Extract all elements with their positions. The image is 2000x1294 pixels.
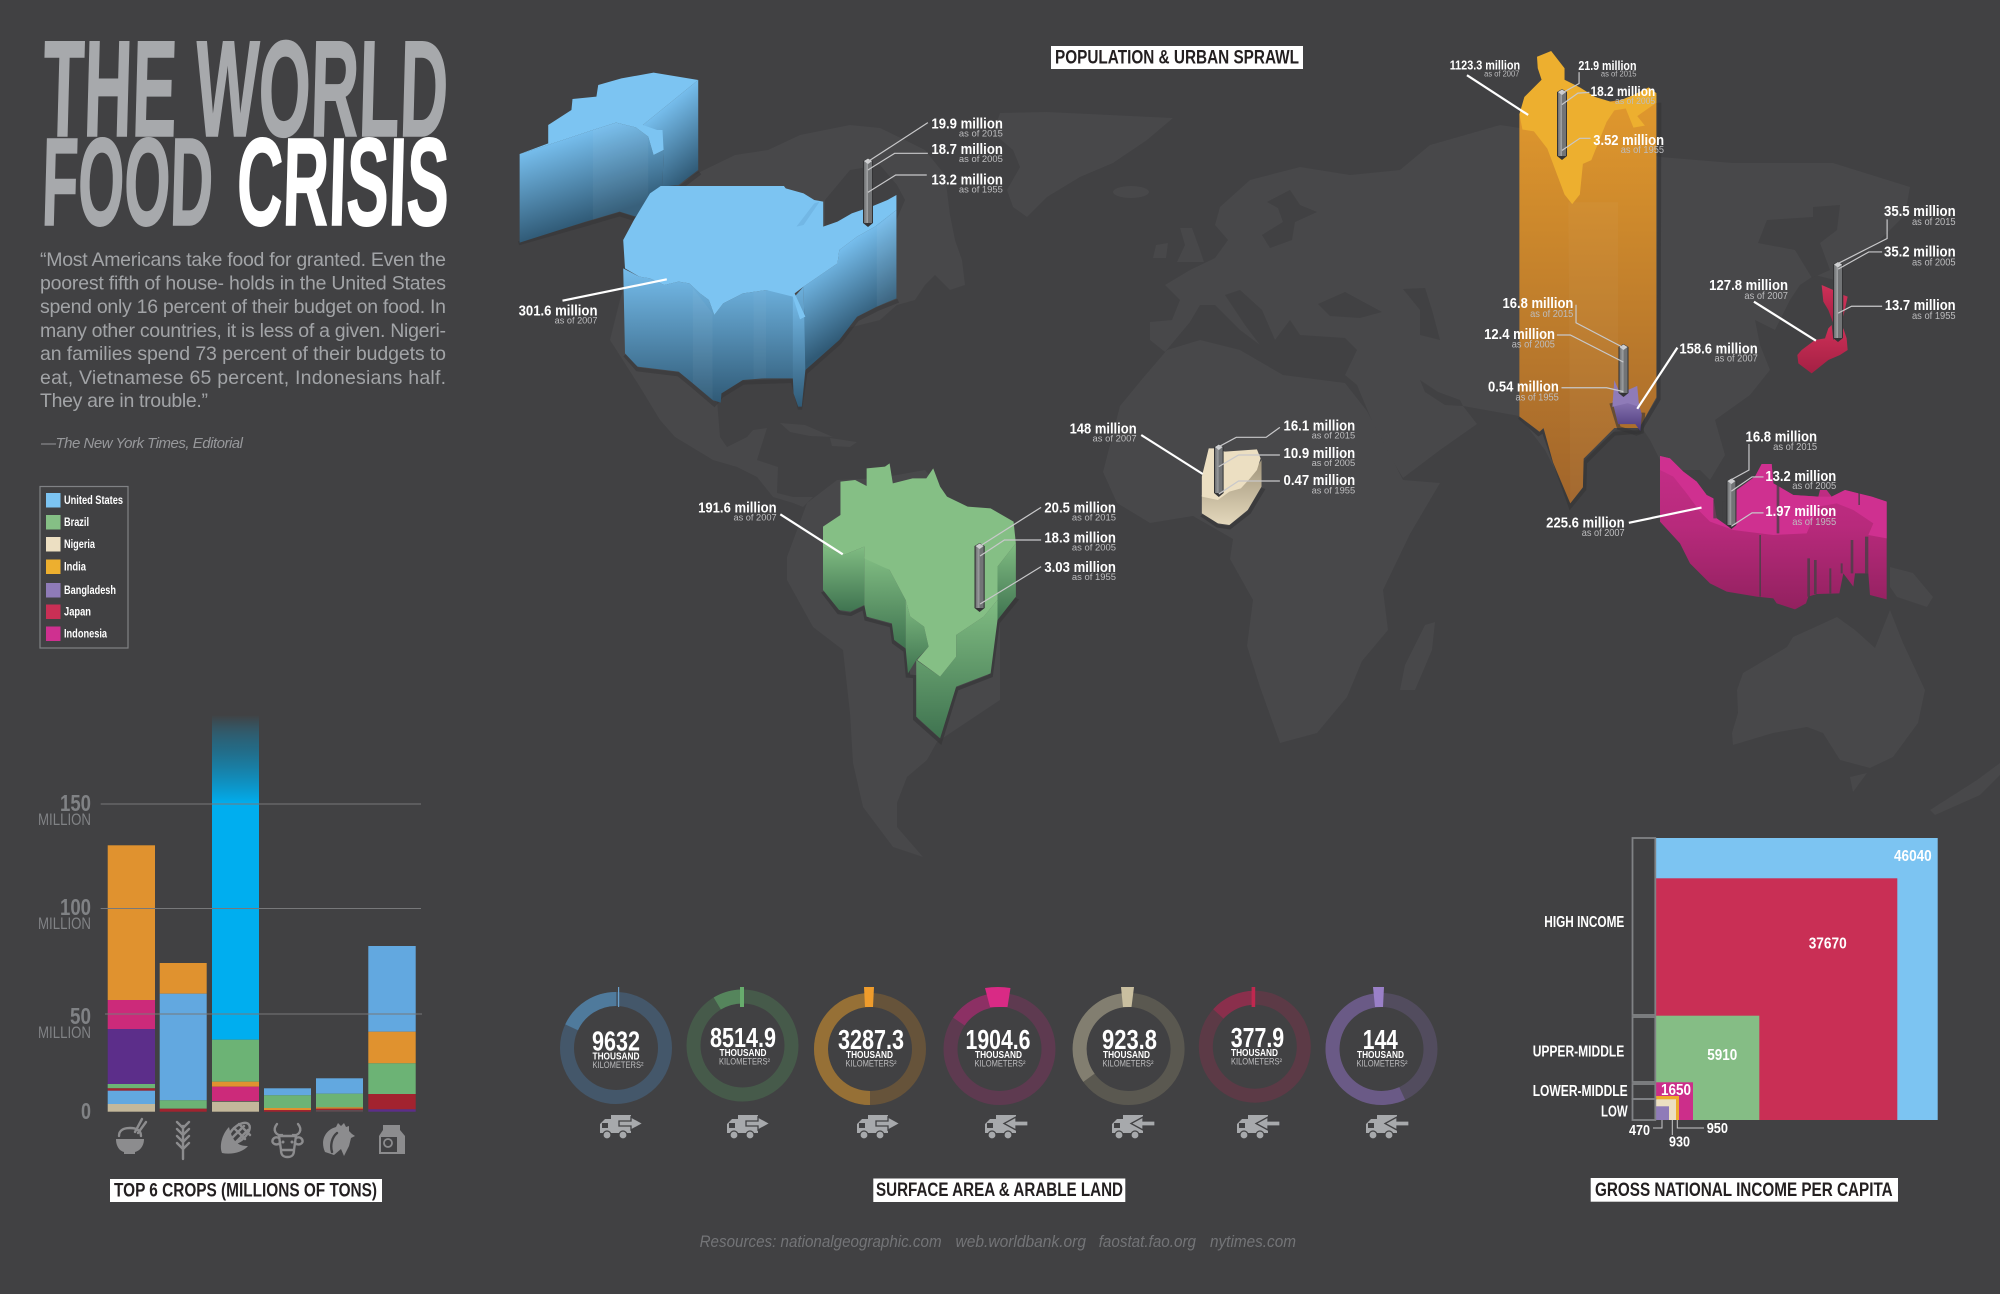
chart axis labels: MILLION [38, 1023, 91, 1042]
callouts: India: as of 2015 [1601, 70, 1637, 79]
callouts: Nigeria: 16.1 million [1284, 417, 1355, 434]
title [40, 13, 451, 252]
panel: Japan 3D map [1709, 203, 1956, 373]
nested area chart: gross national income per capita: UPPER-MIDDLE [1533, 1044, 1625, 1061]
donut: Brazil surface area [675, 978, 810, 1113]
callouts: Japan: 35.2 million [1884, 244, 1956, 261]
callouts: Japan: as of 1955 [1912, 311, 1956, 322]
icon: rooster [323, 1123, 355, 1156]
title: CRISIS [235, 113, 451, 252]
donut: Bangladesh surface area [1316, 984, 1447, 1114]
donut: India surface area [821, 987, 919, 1098]
callouts: Bangladesh: 16.8 million [1503, 295, 1573, 312]
callouts: Nigeria: 148 million [1070, 420, 1137, 437]
legend: Brazil [64, 515, 89, 529]
nested area chart: gross national income per capita [1533, 838, 1938, 1151]
callouts: US: as of 1955 [959, 185, 1003, 196]
nested area chart: gross national income per capita: HIGH INCOME [1544, 914, 1625, 931]
callouts: Bangladesh: as of 2005 [1512, 340, 1555, 351]
chart grid lines [101, 804, 422, 1014]
legend: Bangladesh [64, 583, 116, 597]
icon: cow head [272, 1124, 303, 1157]
callouts: India: 3.52 million [1593, 132, 1664, 149]
callouts: Brazil [698, 499, 1116, 604]
population pin: Indonesia [1726, 478, 1736, 529]
callouts: US: as of 2007 [555, 316, 597, 326]
callouts: Bangladesh: as of 2015 [1530, 309, 1574, 320]
callouts: Indonesia: 16.8 million [1746, 428, 1817, 445]
population pin: Japan [1833, 262, 1843, 342]
icon: milk carton [379, 1125, 405, 1154]
legend [40, 486, 128, 648]
quote text block: They are in trouble.” [40, 390, 208, 412]
donut: United States surface area [551, 983, 681, 1113]
resources footer: web.worldbank.org [956, 1233, 1087, 1251]
callouts: Indonesia: as of 1955 [1792, 517, 1837, 528]
heading: gross national income per capita: GROSS NATIONAL INCOME PER CAPITA [1595, 1180, 1893, 1201]
legend: United States [64, 493, 123, 507]
quote text block: an families spend 73 percent of their budgets to [40, 343, 446, 365]
callouts: Indonesia [1546, 428, 1837, 539]
callouts: Japan: as of 2015 [1912, 217, 1956, 228]
icons: export and import trucks [600, 1115, 1409, 1139]
callouts: Brazil: as of 2007 [733, 513, 777, 523]
donut: Bangladesh surface area: 144 [1363, 1024, 1398, 1055]
donut: Japan surface area: 377.9 [1231, 1022, 1284, 1053]
callouts: Indonesia: as of 2005 [1792, 481, 1837, 492]
callouts: Nigeria: as of 2005 [1312, 459, 1355, 468]
heading: surface area and arable land: SURFACE AREA & ARABLE LAND [876, 1180, 1123, 1201]
legend: India [64, 560, 86, 574]
world map background [610, 112, 2000, 857]
population pin: India [1557, 89, 1567, 160]
resources footer [700, 1233, 1296, 1251]
nested area chart: gross national income per capita: LOWER-MIDDLE [1533, 1083, 1628, 1100]
donut: India surface area: KILOMETERS² [846, 1058, 896, 1068]
callouts: Nigeria: as of 2015 [1312, 431, 1355, 441]
callouts: Indonesia: 225.6 million [1546, 514, 1625, 531]
callouts: Japan: 35.5 million [1884, 203, 1956, 220]
chart axis labels: 150 [60, 790, 91, 816]
callouts: US: 13.2 million [931, 172, 1003, 189]
callouts: Brazil: as of 2005 [1072, 543, 1116, 553]
nested area chart: gross national income per capita: 950 [1707, 1120, 1728, 1137]
callouts: Nigeria [1070, 417, 1355, 496]
callouts: Brazil: 20.5 million [1044, 499, 1116, 516]
chart axis labels: MILLION [38, 914, 91, 933]
chart axis labels: 100 [60, 894, 91, 920]
bar: beef [264, 1088, 311, 1112]
callouts: Bangladesh: as of 2007 [1715, 353, 1758, 364]
callouts: Japan: 13.7 million [1885, 297, 1956, 314]
donut: Indonesia surface area: KILOMETERS² [974, 1058, 1026, 1068]
bar: dairy [368, 946, 416, 1112]
donut: Bangladesh surface area: THOUSAND [1357, 1050, 1404, 1061]
callouts: India: as of 2005 [1615, 96, 1655, 106]
callouts: Bangladesh: 12.4 million [1484, 326, 1555, 343]
nested area chart: gross national income per capita: 46040 [1894, 848, 1932, 865]
callouts: Japan [1709, 203, 1956, 341]
quote text block: spend only 16 percent of their budget on food. In [40, 296, 446, 318]
donut: Japan surface area: KILOMETERS² [1231, 1056, 1282, 1066]
donut: India surface area: 3287.3 [838, 1024, 904, 1055]
donut: Nigeria surface area [1060, 981, 1197, 1117]
callouts: US: 19.9 million [931, 116, 1003, 132]
callouts: India: 21.9 million [1578, 59, 1636, 73]
heading: population and urban sprawl: POPULATION & URBAN SPRAWL [1055, 48, 1299, 68]
callouts: Brazil: 191.6 million [698, 499, 777, 516]
nested area chart: gross national income per capita: 37670 [1809, 936, 1847, 953]
donut: United States surface area: KILOMETERS² [592, 1060, 644, 1070]
donut: Bangladesh surface area: KILOMETERS² [1356, 1058, 1408, 1068]
icon: corn [221, 1119, 253, 1154]
callouts: Brazil: 18.3 million [1044, 529, 1116, 546]
donut: United States surface area: THOUSAND [592, 1052, 640, 1062]
callouts: Japan: as of 2005 [1912, 257, 1956, 268]
population pin: Nigeria [1214, 444, 1224, 497]
donut: Brazil surface area: 8514.9 [710, 1022, 776, 1053]
callouts: US: 301.6 million [519, 303, 597, 319]
callouts: Bangladesh: 0.54 million [1488, 379, 1559, 396]
donut: Indonesia surface area [931, 981, 1068, 1117]
callouts: Japan: 127.8 million [1709, 277, 1788, 294]
callouts: US [519, 116, 1003, 326]
callouts: India: 1123.3 million [1450, 58, 1520, 72]
quote text block [40, 249, 446, 412]
callouts: India: as of 1955 [1621, 145, 1664, 156]
icon: wheat [177, 1122, 189, 1159]
callouts: India: 18.2 million [1591, 83, 1655, 99]
callouts: Indonesia: 13.2 million [1765, 468, 1836, 485]
donut: Nigeria surface area: THOUSAND [1103, 1050, 1150, 1061]
title: FOOD [40, 113, 215, 252]
population pin: Bangladesh [1618, 344, 1628, 397]
donut: Indonesia surface area: THOUSAND [975, 1050, 1022, 1061]
callouts: Nigeria: 10.9 million [1284, 445, 1355, 461]
callouts: Indonesia: 1.97 million [1765, 503, 1836, 520]
bar: rice [108, 845, 155, 1112]
bar: corn [212, 715, 259, 1112]
population pin: Brazil [974, 543, 985, 612]
callouts: India: as of 2007 [1484, 69, 1520, 78]
callouts: US: as of 2005 [959, 154, 1003, 165]
callouts: India [1450, 58, 1664, 156]
resources footer: Resources: nationalgeographic.com [700, 1233, 942, 1251]
callouts: Brazil: as of 2015 [1072, 513, 1116, 523]
nested area chart: gross national income per capita: 5910 [1707, 1047, 1737, 1064]
donut: Indonesia surface area: 1904.6 [966, 1024, 1030, 1055]
panel: United States 3D map [519, 73, 1003, 409]
panel: Nigeria 3D map [1070, 417, 1355, 528]
population pin: US [863, 158, 873, 227]
donut: Nigeria surface area: 923.8 [1102, 1024, 1157, 1055]
nested area chart: gross national income per capita: 470 [1629, 1122, 1650, 1139]
callouts: Brazil: 3.03 million [1044, 559, 1116, 575]
quote text block: many other countries, it is less of a given. Nigeri- [40, 320, 446, 342]
nested area chart: gross national income per capita: 930 [1669, 1134, 1690, 1151]
callouts: Indonesia: as of 2015 [1773, 442, 1818, 453]
donut: Japan surface area [1186, 977, 1324, 1116]
resources footer: nytimes.com [1210, 1233, 1296, 1251]
icon: rice bowl [116, 1119, 146, 1154]
text: THE WORLD [41, 13, 450, 166]
resources footer: faostat.fao.org [1099, 1233, 1197, 1251]
quote text block: eat, Vietnamese 65 percent, Indonesians half. [40, 367, 446, 389]
bar: poultry [316, 1078, 363, 1112]
callouts: Bangladesh [1484, 295, 1758, 409]
callouts: Brazil: as of 1955 [1072, 573, 1116, 582]
chart axis labels: 0 [81, 1098, 91, 1124]
heading: top 6 crops: TOP 6 CROPS (MILLIONS OF TONS) [114, 1180, 377, 1202]
donut: Brazil surface area: THOUSAND [720, 1048, 766, 1059]
bar chart: top 6 crops [108, 715, 416, 1112]
callouts: Bangladesh: as of 1955 [1516, 392, 1559, 403]
callouts: Japan: as of 2007 [1744, 291, 1788, 302]
chart axis labels: 50 [70, 1003, 91, 1029]
chart axis labels: MILLION [38, 810, 91, 829]
legend: Japan [64, 604, 91, 618]
callouts: Nigeria: as of 2007 [1093, 434, 1137, 444]
callouts: Nigeria: as of 1955 [1312, 486, 1355, 496]
legend: Nigeria [64, 537, 95, 551]
donut: Brazil surface area: KILOMETERS² [719, 1056, 770, 1066]
panel: India 3D map [1450, 51, 1664, 506]
donut: United States surface area: 9632 [592, 1026, 640, 1057]
nested area chart: gross national income per capita: LOW [1601, 1104, 1628, 1121]
panel: Indonesia 3D map [1546, 428, 1887, 609]
callouts: Nigeria: 0.47 million [1284, 472, 1355, 488]
donut: Nigeria surface area: KILOMETERS² [1102, 1058, 1154, 1068]
quote text block: “Most Americans take food for granted. Even the [40, 249, 446, 271]
legend: Indonesia [64, 626, 107, 640]
callouts: US: 18.7 million [931, 141, 1003, 158]
callouts: US: as of 2015 [959, 129, 1003, 140]
donut: India surface area: THOUSAND [846, 1050, 893, 1061]
panel: Brazil 3D map [698, 463, 1116, 741]
quote attribution: —The New York Times, Editorial [40, 435, 244, 452]
panel: Bangladesh 3D map [1484, 295, 1758, 434]
nested area chart: gross national income per capita: 1650 [1661, 1082, 1691, 1099]
quote text block: poorest fifth of house- holds in the United States [40, 273, 446, 295]
chart axis labels [38, 790, 91, 1124]
callouts: Bangladesh: 158.6 million [1679, 340, 1758, 357]
bar: wheat [160, 963, 207, 1112]
donut: Japan surface area: THOUSAND [1231, 1048, 1278, 1059]
callouts: Indonesia: as of 2007 [1582, 528, 1625, 539]
